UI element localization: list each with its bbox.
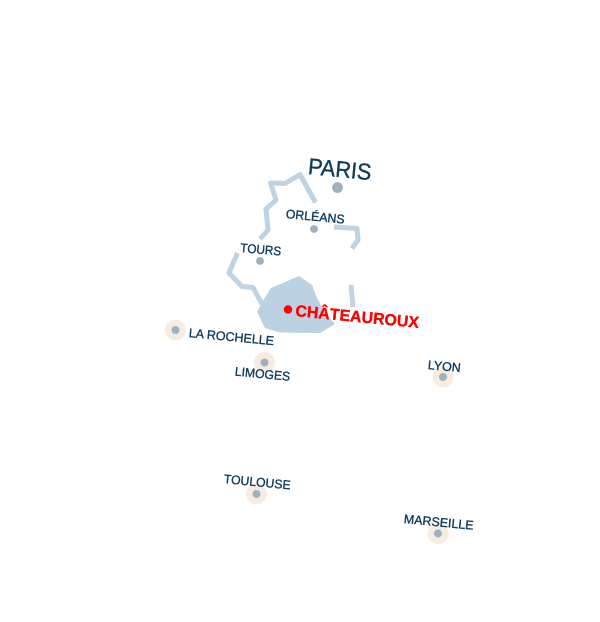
city marker: Châteauroux	[284, 305, 292, 314]
label: Marseille: MARSEILLE	[403, 512, 474, 533]
label: La Rochelle: LA ROCHELLE	[188, 326, 275, 348]
city marker: Limoges	[254, 352, 275, 373]
city marker: Orléans	[310, 225, 318, 233]
city marker: Lyon	[432, 366, 454, 388]
label: Tours: TOURS	[240, 241, 282, 259]
region outline	[229, 174, 358, 307]
city marker: Tours	[256, 257, 264, 265]
label: Paris: PARIS	[307, 153, 373, 185]
city marker: Marseille	[428, 523, 448, 544]
city marker: La Rochelle	[165, 320, 186, 340]
label: Limoges: LIMOGES	[234, 365, 291, 384]
label: Orléans: ORLÉANS	[285, 206, 345, 227]
city marker: Toulouse	[246, 484, 267, 504]
label: Châteauroux: CHÂTEAUROUX	[295, 301, 420, 332]
highlighted Châteauroux area	[257, 276, 335, 333]
city marker: Paris	[332, 182, 343, 193]
label: Lyon: LYON	[427, 358, 461, 375]
label: Toulouse: TOULOUSE	[223, 472, 291, 492]
